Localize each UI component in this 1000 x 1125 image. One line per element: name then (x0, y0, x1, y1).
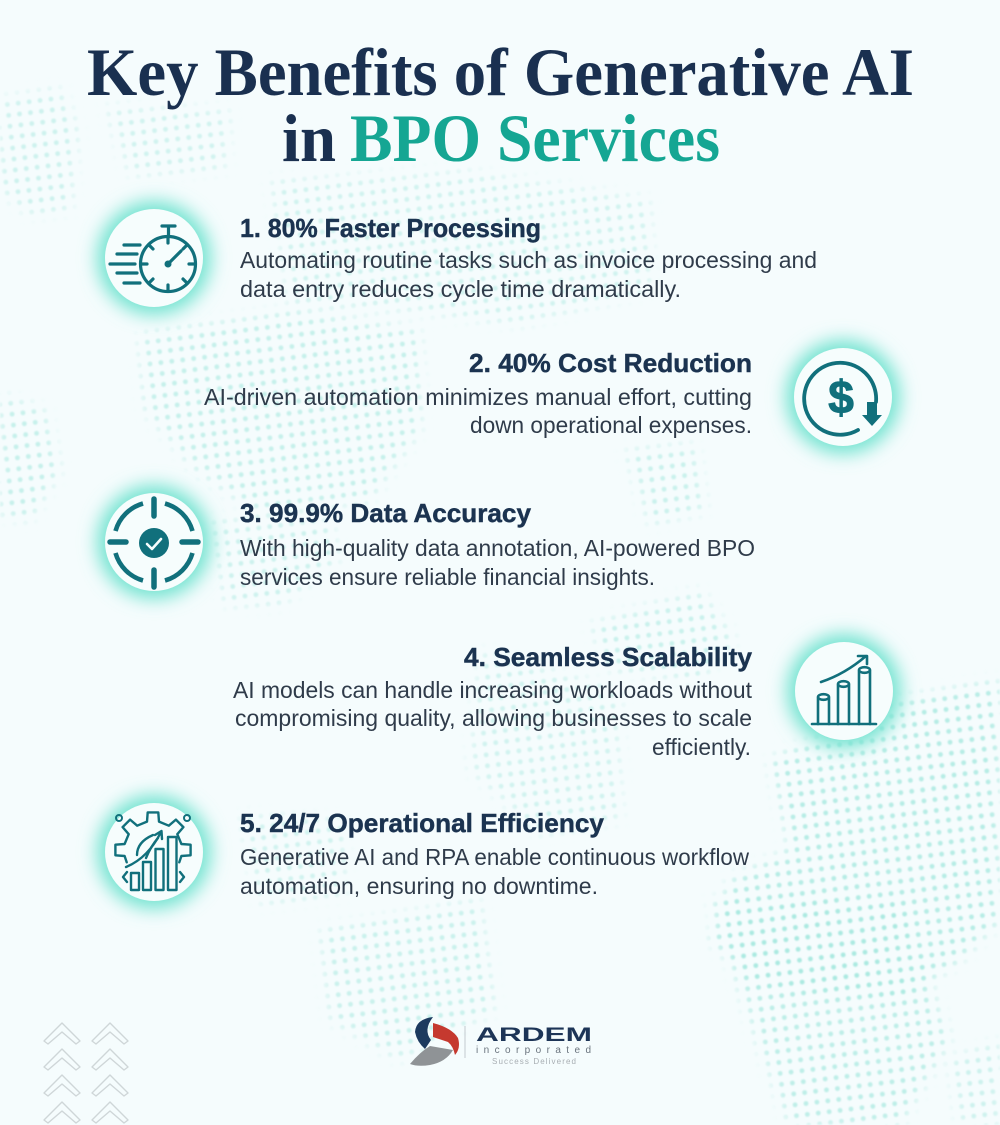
benefit 4: scalability (233, 634, 901, 760)
decorative chevrons (44, 1023, 128, 1123)
title (87, 34, 914, 176)
body text (240, 247, 817, 302)
tagline: incorporated (476, 1045, 591, 1056)
icon: target with check (97, 485, 211, 599)
benefit 2: cost reduction (204, 340, 900, 454)
slogan: Success Delivered (492, 1057, 576, 1066)
body text: efficiently. (652, 734, 751, 760)
heading: 4. Seamless Scalability (464, 642, 753, 672)
title: in (282, 100, 336, 176)
icon: dollar with down arrow: $ (828, 371, 854, 423)
heading: 5. 24/7 Operational Efficiency (240, 808, 605, 838)
benefit 3: data accuracy (97, 485, 755, 599)
body text: compromising quality, allowing businesses to scale (235, 705, 752, 731)
body text: automation, ensuring no downtime. (240, 873, 598, 899)
benefit 1: faster processing (97, 201, 817, 315)
body text: services ensure reliable financial insights. (240, 564, 655, 590)
benefit 5: operational efficiency (97, 795, 749, 909)
heading: 3. 99.9% Data Accuracy (240, 498, 532, 528)
body text: down operational expenses. (470, 412, 752, 438)
heading: 1. 80% Faster Processing (240, 213, 541, 243)
icon: gear with bars (97, 795, 211, 909)
body text: AI models can handle increasing workloads without (233, 677, 753, 703)
title: BPO Services (350, 100, 720, 176)
body text (240, 535, 755, 590)
body text (204, 384, 752, 438)
body text: AI-driven automation minimizes manual effort, cutting (204, 384, 752, 410)
icon: logo star (410, 1017, 459, 1066)
title: Key Benefits of Generative AI (87, 34, 914, 110)
body text (240, 844, 749, 899)
icon: rising bar chart (787, 634, 901, 748)
body text: With high-quality data annotation, AI-powered BPO (240, 535, 755, 561)
icon: stopwatch (97, 201, 211, 315)
icon: dollar with down arrow (786, 340, 900, 454)
body text (233, 677, 753, 760)
body text: Generative AI and RPA enable continuous workflow (240, 844, 749, 870)
body text: data entry reduces cycle time dramatically. (240, 276, 681, 302)
wordmark: ARDEM (476, 1025, 592, 1046)
heading: 2. 40% Cost Reduction (469, 348, 752, 378)
body text: Automating routine tasks such as invoice processing and (240, 247, 817, 273)
logo: ARDEM Incorporated (410, 1017, 592, 1066)
